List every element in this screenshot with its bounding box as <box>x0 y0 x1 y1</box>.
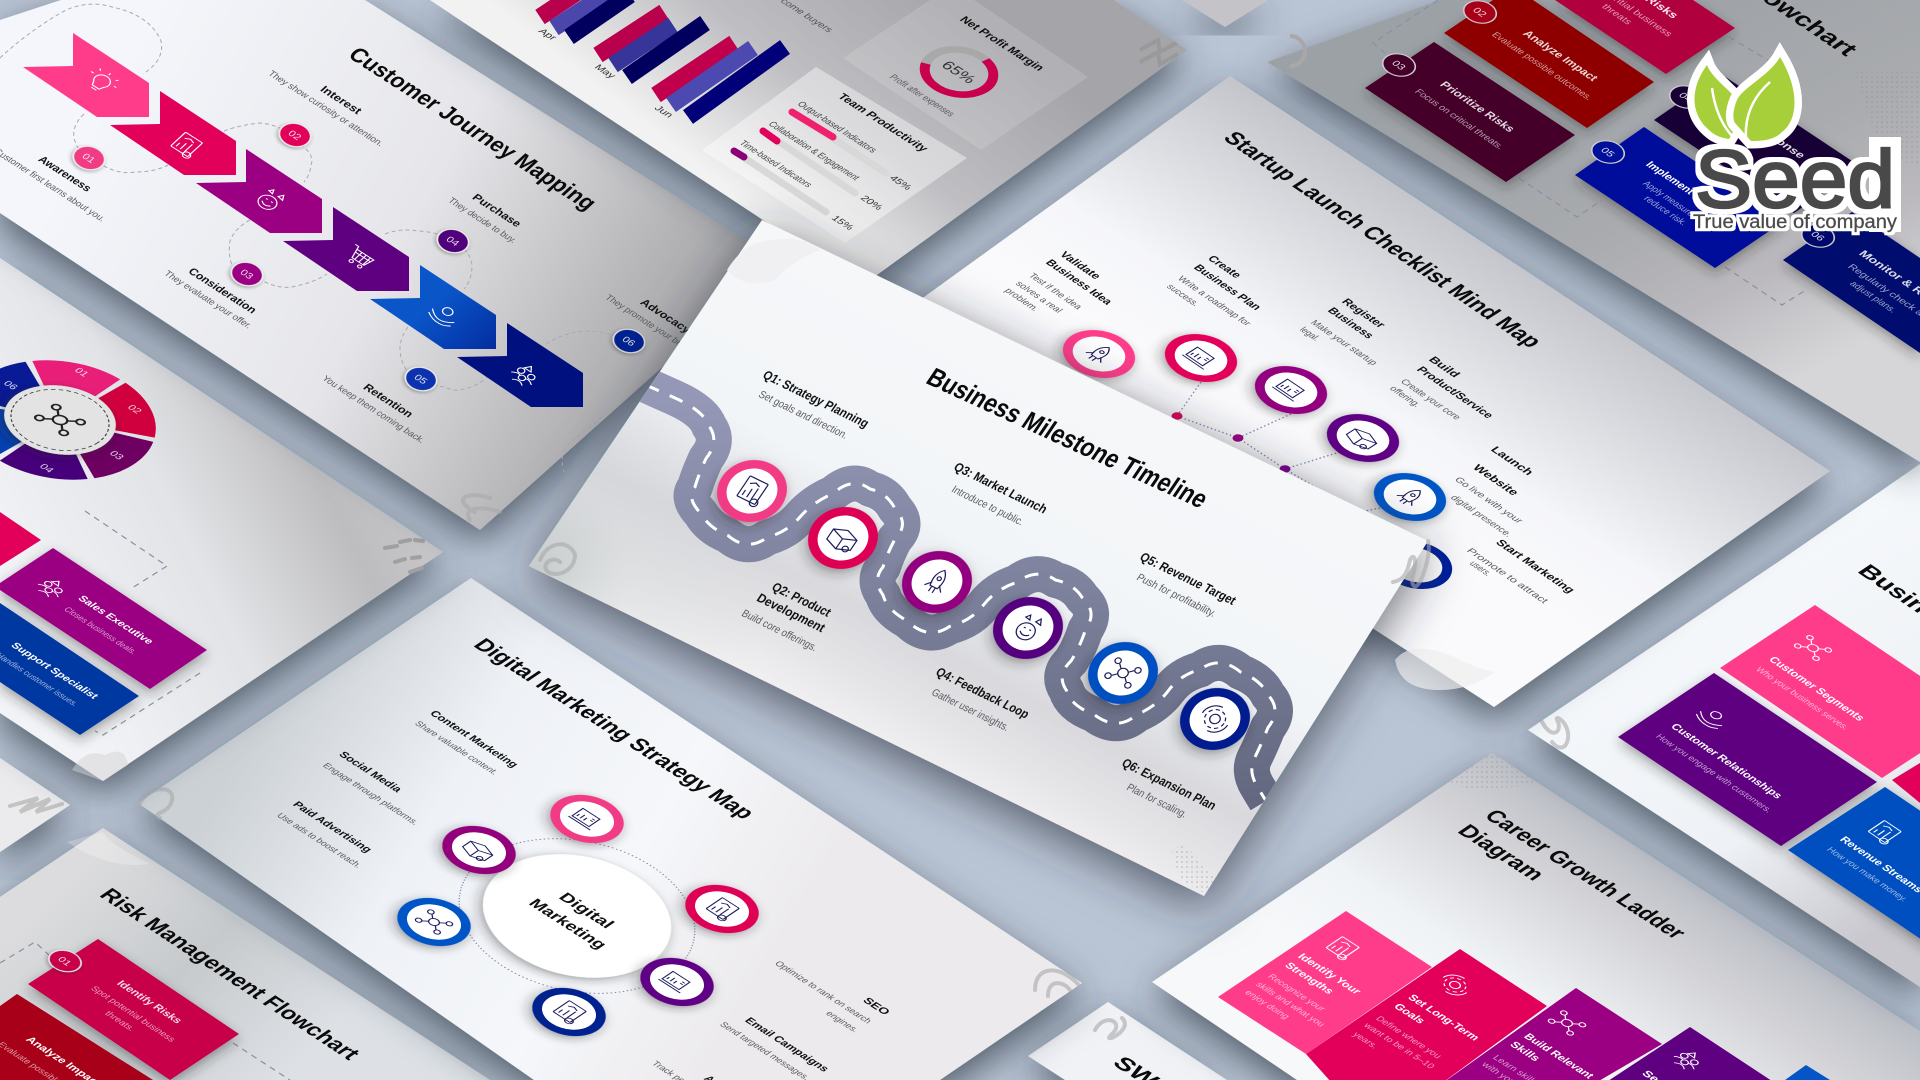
wheel labels: 03 <box>107 450 126 462</box>
card: crimson <box>0 512 41 566</box>
caption: profit after expenses: Profit after expenses <box>887 73 956 118</box>
axis labels: May <box>592 63 618 81</box>
badge 01: 01 <box>55 955 74 968</box>
text: awareness: Awareness <box>36 153 95 194</box>
card 5: implement controls: Implement Controls <box>1643 159 1737 223</box>
progress labels: 15% <box>829 214 855 232</box>
text: advocacy: They promote your brand. <box>603 293 698 357</box>
card 5: implement controls: 05 <box>1598 146 1617 159</box>
donut chart 65% <box>920 46 998 98</box>
step: magenta: Skills <box>1507 1039 1544 1063</box>
dashed connectors <box>0 4 647 472</box>
arrow 6: navy <box>457 323 583 407</box>
step: crimson <box>1306 949 1547 1080</box>
card 2: analyze impact: Analyze Impact <box>1520 28 1601 83</box>
text: social media <box>320 749 421 827</box>
card 4: develop response: Develop Response <box>1702 88 1809 161</box>
step: pink <box>1218 911 1432 1054</box>
step: pink: skills and what you <box>1253 981 1327 1028</box>
text: register <box>1297 296 1389 367</box>
step: blue <box>1785 1065 1830 1080</box>
step: pink: Recognize your <box>1265 973 1327 1013</box>
text: launch website: digital presence. <box>1448 494 1514 539</box>
card 1: identify risks: threats <box>1599 3 1634 26</box>
text: Q1: Set goals and direction. <box>756 389 850 441</box>
milestone 6 icon <box>1167 677 1263 761</box>
text: validate <box>1002 249 1116 315</box>
card: sales executive <box>0 548 207 689</box>
badges 01 to 06: 04 <box>443 235 461 249</box>
text: validate: solves a real <box>1013 280 1064 315</box>
step: crimson: Set Long-Term <box>1405 992 1483 1043</box>
step: crimson: Goals <box>1391 1001 1429 1026</box>
text: register: Business <box>1325 305 1377 341</box>
arrow 3: magenta <box>196 149 322 233</box>
text: validate: problem. <box>1002 287 1041 313</box>
slide: Startup Launch Checklist Mind Map <box>895 76 1830 707</box>
heading: net profit margin: Net Profit Margin <box>957 14 1047 73</box>
text: create plan: success. <box>1164 283 1201 308</box>
slide: small left zigzag <box>0 758 70 852</box>
card 6: monitor and review <box>1783 212 1920 353</box>
text: launch website <box>1448 444 1537 539</box>
text: start marketing: Start Marketing <box>1493 537 1578 595</box>
axis labels <box>536 27 675 120</box>
wheel labels: 02 <box>125 404 144 416</box>
text: purchase: Purchase <box>470 191 525 229</box>
card: customer relationships <box>1618 673 1877 846</box>
bar chart <box>540 0 785 117</box>
text: retention: You keep them coming back. <box>320 374 427 445</box>
text: create plan: Business Plan <box>1191 262 1264 312</box>
card: customer relationships: Customer Relationships <box>1668 721 1786 801</box>
text: email campaigns: Email Campaigns <box>742 1015 833 1074</box>
text: Q2: Development <box>754 590 829 635</box>
text: Q3: Introduce to public. <box>949 484 1026 528</box>
node 3: register <box>1240 356 1342 424</box>
text: Q1: Q1: Strategy Planning <box>760 367 872 430</box>
slide: organisation chart left <box>0 258 443 781</box>
text: launch website: Launch <box>1488 444 1537 477</box>
text: awareness <box>0 147 107 224</box>
progress bars <box>734 112 886 212</box>
card 1: identify risks <box>1555 0 1735 74</box>
text: interest: Interest <box>318 83 365 116</box>
card 2: analyze impact: 02 <box>1470 6 1489 19</box>
text: content marketing: Content Marketing <box>427 708 521 769</box>
progress labels: 20% <box>858 194 884 212</box>
card: customer segments: Customer Segments <box>1766 654 1868 723</box>
logo wordmark: Seed <box>1695 134 1895 225</box>
card 3: prioritize risks: Focus on critical threats. <box>1412 88 1506 151</box>
badges 01 to 06: 05 <box>411 373 429 387</box>
card 2: analyze impact: Evaluate possible outcomes. <box>1489 31 1594 102</box>
card 3: prioritize risks: 03 <box>1389 59 1408 72</box>
text: paid advertising: Use ads to boost reach. <box>274 812 364 870</box>
step: pink: enjoy doing <box>1242 989 1291 1021</box>
node 1: validate <box>1048 320 1150 388</box>
text: launch website: Website <box>1470 462 1522 498</box>
node 2: business plan <box>1150 324 1252 392</box>
slide: Risk Management Flowchart upper right <box>1267 0 1920 462</box>
text: Q5: Push for profitability. <box>1134 572 1218 620</box>
card: revenue streams <box>1788 787 1920 960</box>
progress labels: Collaboration & Engagement <box>766 120 861 182</box>
logo tagline: True value of company <box>1693 212 1898 233</box>
text: build product: Build <box>1426 354 1463 379</box>
node 4: product <box>1312 404 1414 472</box>
text: Q2: Q2: Product <box>769 579 835 620</box>
card: sales executive: Closes business deals. <box>61 606 139 656</box>
slide: Digital Marketing Strategy Map <box>138 578 1082 1080</box>
hub: digital marketing <box>445 829 709 1003</box>
heading: milestone title: Business Milestone Timeline <box>921 363 1214 514</box>
milestone 3 icon <box>889 540 985 624</box>
text: start marketing: Promote to attract <box>1464 547 1550 605</box>
icon ring magenta <box>427 816 531 884</box>
text: validate: Test if the idea <box>1026 272 1084 311</box>
slide: Business Milestone Timeline <box>529 220 1429 896</box>
progress labels <box>737 100 913 232</box>
slide: Career Growth Ladder Diagram <box>1152 753 1920 1080</box>
slide: Customer Journey Mapping <box>0 0 780 530</box>
text: Q2: Build core offerings. <box>739 608 820 654</box>
badges 01 to 06: 06 <box>619 335 637 349</box>
text: paid advertising: Paid Advertising <box>290 799 375 854</box>
step: pink: Identify Your <box>1295 951 1365 996</box>
card: identify risks: threats. <box>102 1010 137 1033</box>
slide: small top fragment <box>1182 0 1268 27</box>
logo: Seed <box>1693 57 1901 233</box>
progress labels: 45% <box>887 174 913 192</box>
text: build product <box>1387 354 1497 422</box>
text: validate: Validate <box>1057 249 1104 281</box>
text: build product: Product/Service <box>1414 364 1497 420</box>
text: social media: Engage through platforms. <box>320 762 421 827</box>
card: customer relationships: How you engage with customers. <box>1653 733 1774 815</box>
card: sales executive: Sales Executive <box>75 594 156 646</box>
heading: journey title: Customer Journey Mapping <box>343 43 602 215</box>
text: start marketing: users. <box>1467 560 1493 578</box>
heading: career title <box>1452 806 1691 943</box>
badges 01 to 06 <box>67 118 651 396</box>
wheel hub <box>0 371 138 469</box>
icon ring pink <box>535 785 639 853</box>
text: advocacy: Advocacy <box>638 296 694 336</box>
text: register: legal. <box>1297 326 1322 343</box>
milestone 2 icon <box>795 496 891 580</box>
card 5: implement controls: reduce risk. <box>1641 195 1689 227</box>
card: support specialist <box>0 603 139 735</box>
card: customer segments: Who your business serves. <box>1753 666 1851 732</box>
text: consideration: They evaluate your offer. <box>162 269 254 331</box>
text: register: Register <box>1339 296 1389 330</box>
text: Q4: Q4: Feedback Loop <box>933 664 1032 721</box>
card: identify risks: Identify Risks <box>114 978 186 1026</box>
card 5: implement controls: Apply measures to <box>1640 180 1708 226</box>
heading: startup title: Startup Launch Checklist Mind Map <box>1218 128 1547 352</box>
slide: Risk Management Flowchart lower left <box>0 828 490 1080</box>
card: identify risks <box>28 939 239 1080</box>
axis labels: Jun <box>652 104 675 120</box>
milestone 4 icon <box>980 586 1076 670</box>
text: build product: Create your core <box>1398 378 1463 422</box>
progress labels: Output-based Indicators <box>795 100 879 155</box>
text: Q3: Q3: Market Launch <box>951 459 1050 516</box>
text: Q6: Q6: Expansion Plan <box>1119 755 1219 813</box>
arrow 2: crimson <box>110 91 236 175</box>
slide: Business Model Canvas <box>1528 464 1920 987</box>
arrow 1: pink <box>23 33 149 117</box>
text: Q6: Plan for scaling. <box>1124 782 1189 820</box>
diagram: hub and spokes <box>382 785 774 1046</box>
step: magenta <box>1430 988 1662 1080</box>
icon ring blue <box>382 888 486 956</box>
text: social media: Social Media <box>336 749 406 794</box>
panel: net profit margin <box>843 0 1088 150</box>
card: crimson fragment <box>1892 763 1920 803</box>
icon ring navy <box>517 978 621 1046</box>
card 5: implement controls <box>1575 127 1784 268</box>
card: customer segments <box>1720 605 1920 778</box>
wheel labels <box>1 367 144 475</box>
heading: team productivity: Team Productivity <box>835 91 931 154</box>
slide: business dashboard charts <box>430 0 1187 280</box>
text: create plan: Write a roadmap for <box>1175 275 1253 328</box>
step: crimson: want to be in 5–10 <box>1360 1021 1437 1071</box>
card 4: develop response: 04 <box>1676 91 1695 104</box>
arrow 5: blue <box>370 265 496 349</box>
card 2: analyze impact <box>1444 0 1654 128</box>
text: start marketing <box>1464 537 1578 605</box>
text: purchase: They decide to buy. <box>446 196 518 245</box>
text: SEO: SEO <box>860 995 893 1017</box>
text: interest: They show curiosity or attention. <box>266 69 385 148</box>
text: register: Make your startup <box>1308 319 1379 367</box>
text: create plan <box>1164 253 1264 328</box>
card: analyze impact <box>0 994 153 1080</box>
text: launch website: Go live with your <box>1452 476 1525 526</box>
chart: segmented wheel <box>0 328 208 512</box>
card 3: prioritize risks <box>1365 42 1575 182</box>
logo leaves <box>1694 57 1794 141</box>
diagram: hub and spokes: Marketing <box>525 896 611 952</box>
text: retention: Retention <box>361 381 416 420</box>
badges 01 to 06: 02 <box>285 129 303 143</box>
axis labels: Apr <box>536 27 559 43</box>
step: purple <box>1605 1027 1775 1080</box>
card 6: monitor and review: 06 <box>1808 230 1827 243</box>
wheel labels: 04 <box>37 463 56 475</box>
text: SEO: Optimize to rank on search <box>772 960 873 1025</box>
step: crimson: years. <box>1350 1031 1380 1050</box>
arrow 4: purple <box>283 207 409 291</box>
panel: team productivity <box>702 67 967 243</box>
badges 01 to 06: 01 <box>79 152 97 166</box>
text: paid advertising <box>274 799 375 870</box>
dotted connectors <box>1172 382 1380 512</box>
heading: digital marketing title: Digital Marketing Strategy Map <box>468 635 760 823</box>
donut chart 65%: 65% <box>937 59 979 86</box>
icon ring crimson <box>670 875 774 943</box>
card: support specialist: Support Specialist <box>8 641 101 701</box>
heading: career title: Career Growth Ladder <box>1479 806 1691 943</box>
node 5: website <box>1359 463 1461 531</box>
text: Q5: Q5: Revenue Target <box>1137 549 1240 608</box>
badge 01 <box>42 946 88 976</box>
slide: small right fragment <box>1905 468 1920 492</box>
text: content marketing: Share valuable content. <box>412 720 500 777</box>
text: Q2 <box>739 579 835 654</box>
text: validate: Business Idea <box>1043 257 1116 307</box>
progress labels: Time-based Indicators <box>737 139 814 189</box>
step: crimson: Define where you <box>1373 1015 1443 1060</box>
text: build product: offering. <box>1387 385 1423 409</box>
text: create plan: Create <box>1205 253 1245 280</box>
diagram: hub and spokes: Digital <box>555 890 619 931</box>
heading: career title: Diagram <box>1452 821 1549 884</box>
road <box>646 385 1275 801</box>
card: identify risks: Spot potential business <box>88 985 177 1044</box>
wheel labels: 01 <box>72 367 91 379</box>
milestone 5 icon <box>1075 631 1171 715</box>
badges 01 to 06: 03 <box>237 268 255 282</box>
node 6: marketing <box>1365 531 1467 599</box>
card 4: develop response <box>1654 74 1861 213</box>
card 3: prioritize risks: Prioritize Risks <box>1437 79 1518 134</box>
text: Q4: Gather user insights. <box>929 687 1011 734</box>
icon ring purple <box>625 948 729 1016</box>
wheel labels: 06 <box>1 380 20 392</box>
card 6: monitor and review: adjust plans. <box>1847 280 1898 315</box>
text: SEO: engines. <box>823 1010 861 1034</box>
milestone 1 icon <box>704 449 800 533</box>
slide: SWOT analysis <box>1028 1002 1227 1080</box>
step: pink: Strengths <box>1282 960 1337 996</box>
text: consideration: Consideration <box>186 265 260 316</box>
